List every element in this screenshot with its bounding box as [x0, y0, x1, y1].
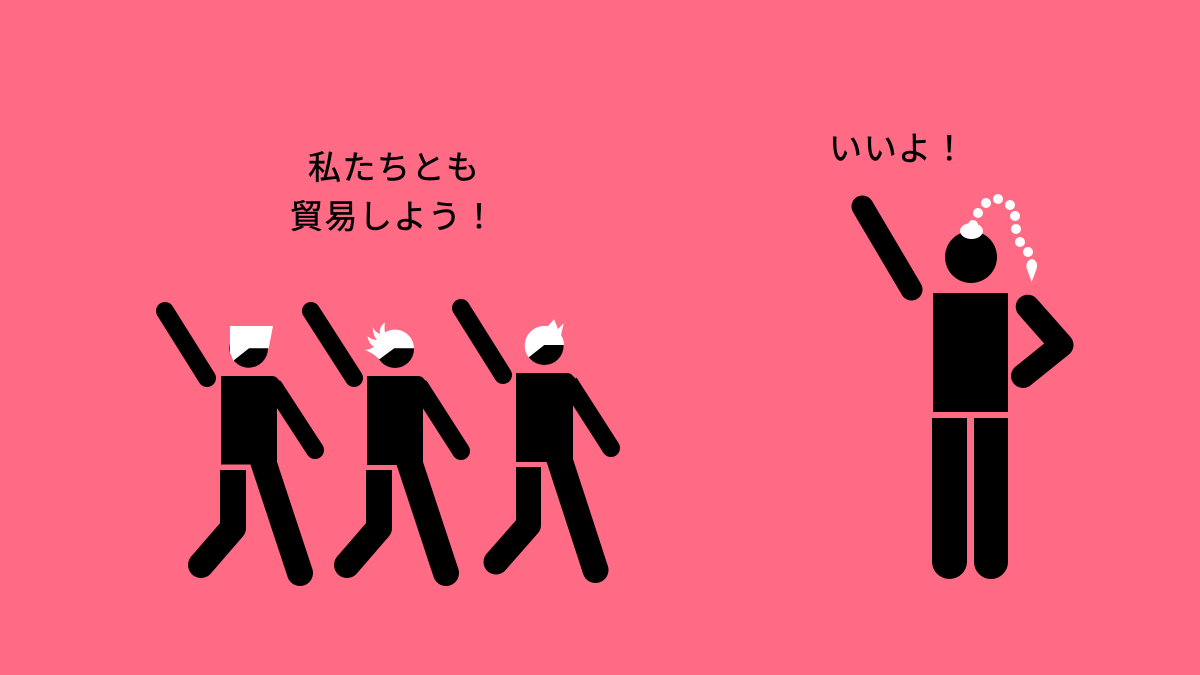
- speech text: group of three: [290, 149, 497, 235]
- speech text: single figure: いいよ！: [829, 130, 968, 167]
- speech text: group of three: 私たちとも: [308, 149, 480, 186]
- figure 1: white flat-cut hair: [165, 311, 324, 578]
- figure 4: large figure with braid: [862, 194, 1062, 579]
- hair bun and braid: [960, 194, 1037, 282]
- figure 2: white spiky hair to the left: [311, 311, 470, 578]
- speech text: group of three: 貿易しよう！: [290, 198, 497, 235]
- figure 3: white hair with top spikes: [461, 308, 620, 574]
